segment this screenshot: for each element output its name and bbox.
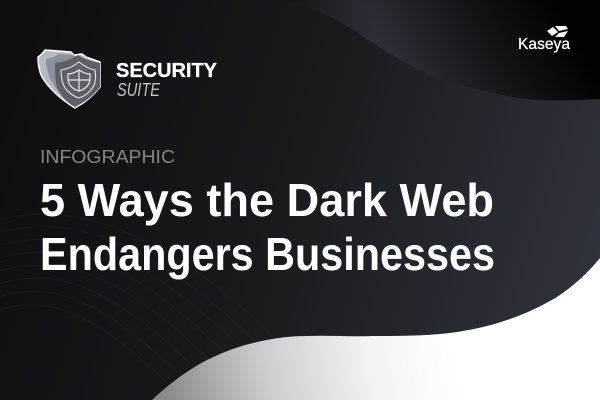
background line pattern <box>0 214 270 400</box>
white bottom right wave <box>152 258 600 400</box>
icon: kaseya mark <box>547 26 568 37</box>
security label: SECURITY <box>116 60 218 82</box>
title line 1: 5 Ways the Dark Web <box>40 174 494 226</box>
top right dark wave <box>285 0 600 100</box>
title line 2: Endangers Businesses <box>40 228 495 280</box>
title <box>40 174 495 280</box>
logo: security suite <box>38 50 218 108</box>
kaseya wordmark: Kaseya <box>518 36 570 53</box>
eyebrow: infographic: INFOGRAPHIC <box>40 147 175 167</box>
kaseya logo <box>518 26 570 53</box>
suite label: SUITE <box>117 80 161 100</box>
icon: layered shield <box>38 50 100 108</box>
